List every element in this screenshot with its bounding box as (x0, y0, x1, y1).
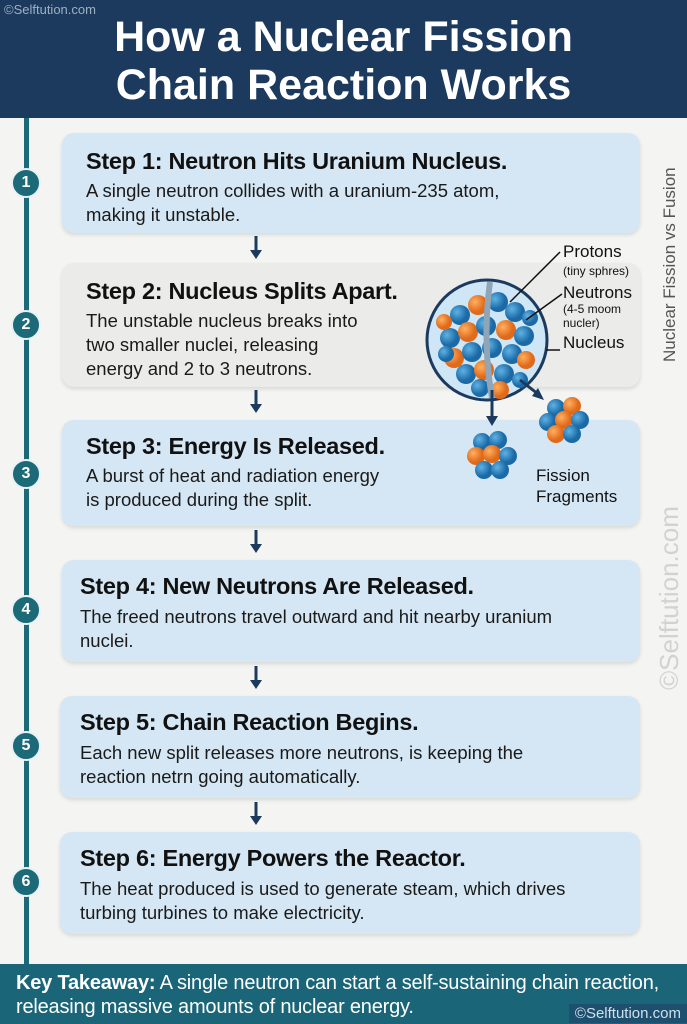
diagram labels: Neutrons (563, 283, 632, 302)
watermark top: ©Selftution.com (4, 2, 96, 17)
panel: step 2: energy and 2 to 3 neutrons. (86, 358, 312, 379)
side text: Nuclear Fission vs Fusion (660, 167, 679, 362)
arrow 3 (250, 530, 262, 553)
panel: step 3 (62, 420, 640, 526)
panel: step 5: Each new split releases more neutrons, is keeping the (80, 742, 523, 763)
title (114, 13, 573, 109)
step 1 number (11, 168, 41, 198)
label: fission fragments: Fragments (536, 487, 617, 506)
step 5 number: 5 (22, 737, 30, 754)
panel: step 4: nuclei. (80, 630, 133, 651)
panel: step 3: A burst of heat and radiation energy (86, 465, 379, 486)
step 3 number: 3 (22, 465, 30, 482)
panel: step 5: reaction netrn going automatically. (80, 766, 360, 787)
label: fission fragments (536, 466, 617, 506)
step 3 number (11, 459, 41, 489)
panel: step 1 (62, 133, 640, 233)
panel: step 6: Step 6: Energy Powers the Reactor. (80, 845, 466, 871)
arrow 5 (250, 802, 262, 825)
panel: step 1: A single neutron collides with a uranium-235 atom, (86, 180, 499, 201)
footer takeaway: releasing massive amounts of nuclear energy. (16, 996, 414, 1018)
panel: step 3: is produced during the split. (86, 489, 312, 510)
panel: step 2 (62, 263, 640, 387)
step 4 number: 4 (22, 601, 30, 618)
arrow 2 (250, 390, 262, 413)
footer takeaway (0, 964, 687, 1024)
diagram labels: (tiny sphres) (563, 264, 629, 278)
step 1 number: 1 (22, 174, 30, 191)
panel: step 3: Step 3: Energy Is Released. (86, 433, 385, 459)
diagram labels: Nucleus (563, 333, 624, 352)
side watermark: ©Selftution.com (654, 506, 684, 690)
panel: step 2: Step 2: Nucleus Splits Apart. (86, 278, 398, 304)
panel: step 4: Step 4: New Neutrons Are Released. (80, 573, 474, 599)
panel: step 6: turbing turbines to make electricity. (80, 902, 364, 923)
step 5 number (11, 731, 41, 761)
title: Chain Reaction Works (116, 61, 571, 109)
step 4 number (11, 595, 41, 625)
panel: step 6: The heat produced is used to generate steam, which drives (80, 878, 565, 899)
panel: step 5: Step 5: Chain Reaction Begins. (80, 709, 418, 735)
label: fission fragments: Fission (536, 466, 590, 485)
title: How a Nuclear Fission (114, 13, 573, 61)
panel: step 4: The freed neutrons travel outward and hit nearby uranium (80, 606, 552, 627)
panel: step 4 (62, 560, 640, 662)
step 6 number (11, 867, 41, 897)
header (0, 0, 687, 118)
panel: step 6 (60, 832, 640, 934)
diagram labels: nucler) (563, 316, 600, 330)
arrow 4 (250, 666, 262, 689)
nucleus diagram (426, 252, 589, 479)
panel: step 2: The unstable nucleus breaks into (86, 310, 358, 331)
diagram labels (563, 242, 632, 352)
panel: step 2: two smaller nuclei, releasing (86, 334, 318, 355)
arrow 1 (250, 236, 262, 259)
timeline line (24, 118, 29, 964)
panel: step 1: making it unstable. (86, 204, 240, 225)
step 2 number: 2 (22, 316, 30, 333)
step 6 number: 6 (22, 873, 30, 890)
diagram labels: (4-5 moom (563, 302, 621, 316)
diagram labels: Protons (563, 242, 622, 261)
panel: step 1: Step 1: Neutron Hits Uranium Nucleus. (86, 148, 507, 174)
panel: step 5 (60, 696, 640, 798)
step 2 number (11, 310, 41, 340)
footer takeaway: Key Takeaway: A single neutron can start a self-sustaining chain reaction, (16, 972, 659, 994)
footer takeaway: ©Selftution.com (575, 1005, 681, 1022)
